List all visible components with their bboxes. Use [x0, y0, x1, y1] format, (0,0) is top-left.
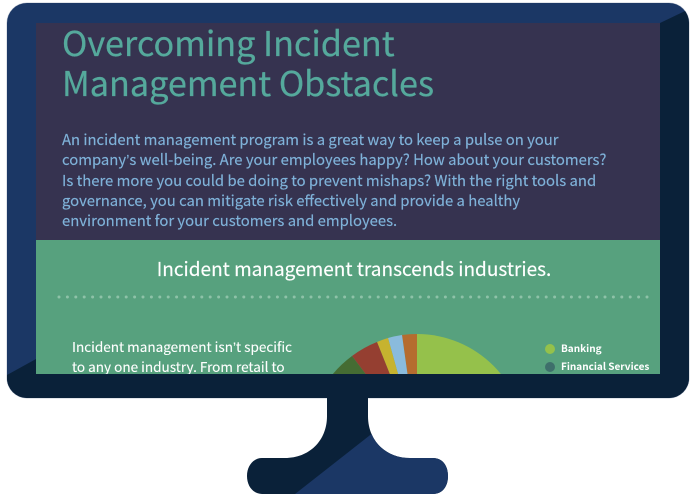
intro paragraph	[62, 129, 606, 231]
monitor bezel	[7, 3, 694, 400]
dotted divider	[58, 296, 648, 298]
section heading: Incident management transcends industries.	[157, 255, 551, 282]
title: Management Obstacles	[62, 56, 434, 106]
intro paragraph: Is there more you could be doing to prevent mishaps? With the right tools and	[62, 170, 596, 191]
intro paragraph: An incident management program is a great way to keep a pulse on your	[62, 129, 559, 150]
legend: banking: Banking	[561, 340, 602, 355]
screen	[36, 23, 660, 374]
intro paragraph: governance, you can mitigate risk effectively and provide a healthy	[62, 190, 520, 211]
legend: financial services: Financial Services	[561, 358, 649, 373]
pie chart	[333, 334, 501, 374]
panel: industries	[36, 240, 660, 374]
monitor stand	[247, 398, 448, 494]
intro paragraph: environment for your customers and employees.	[62, 210, 397, 231]
title	[62, 23, 434, 106]
body text	[72, 336, 292, 374]
intro paragraph: company’s well-being. Are your employees happy? How about your customers?	[62, 149, 606, 170]
body text: Incident management isn’t specific	[72, 336, 292, 356]
